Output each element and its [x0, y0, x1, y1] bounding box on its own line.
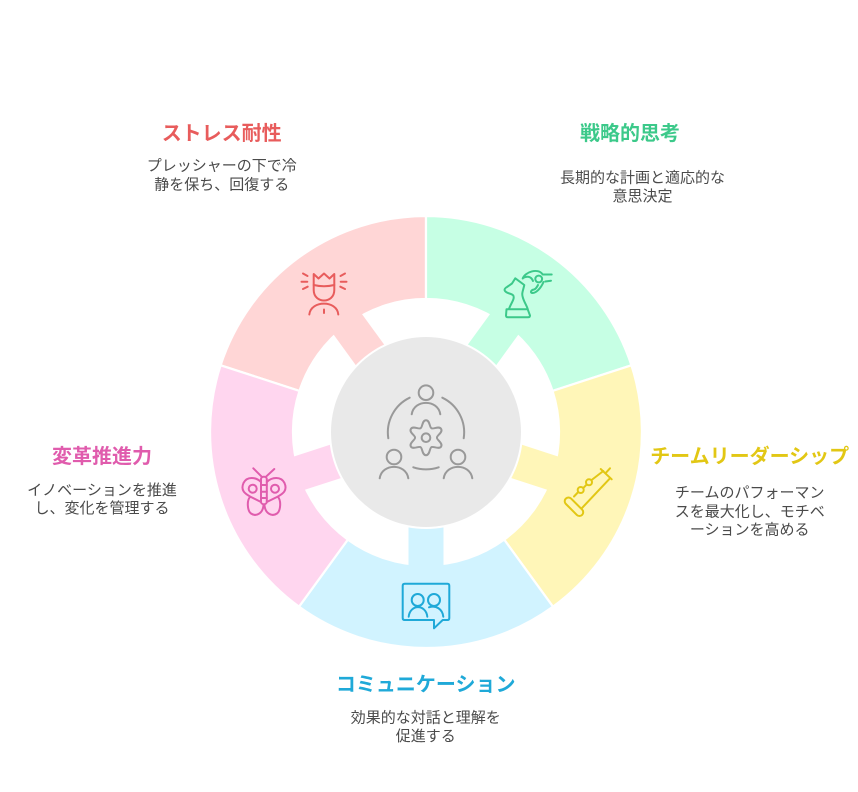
description: 促進する — [396, 728, 456, 745]
heading: ストレス耐性 — [162, 122, 282, 145]
description: プレッシャーの下で冷 — [147, 158, 297, 175]
donut wheel — [210, 216, 642, 648]
description: スを最大化し、モチベ — [675, 504, 825, 520]
label: team leadership — [650, 444, 849, 539]
segment: communication — [299, 522, 553, 648]
label: driving change — [27, 445, 177, 517]
icon: chess knight with eye — [505, 271, 552, 317]
segment: driving change — [210, 365, 348, 607]
description: 効果的な対話と理解を — [351, 710, 501, 727]
icon: team around a gear — [380, 385, 472, 478]
icon: butterfly — [242, 468, 286, 515]
segment: strategic thinking — [426, 216, 631, 391]
label: strategic thinking — [560, 121, 725, 205]
segment: team leadership — [504, 365, 642, 607]
center hub — [329, 335, 523, 529]
icon: communication speech bubble with people — [403, 584, 449, 628]
heading: チームリーダーシップ — [650, 444, 849, 468]
description: チームのパフォーマン — [675, 485, 824, 502]
description: ーションを高める — [690, 522, 810, 539]
icon: abacus — [563, 468, 612, 518]
description: 静を保ち、回復する — [154, 177, 289, 194]
description: 意思決定 — [612, 188, 673, 205]
label: stress tolerance — [147, 122, 297, 194]
label: communication — [336, 673, 516, 745]
description: 長期的な計画と適応的な — [560, 170, 725, 187]
description: し、変化を管理する — [34, 499, 170, 517]
heading: 変革推進力 — [52, 445, 152, 468]
description: イノベーションを推進 — [27, 482, 177, 499]
heading: 戦略的思考 — [580, 121, 680, 145]
heading: コミュニケーション — [336, 673, 516, 696]
segment: stress tolerance — [221, 216, 426, 391]
icon: crowned head with rays — [302, 274, 346, 314]
